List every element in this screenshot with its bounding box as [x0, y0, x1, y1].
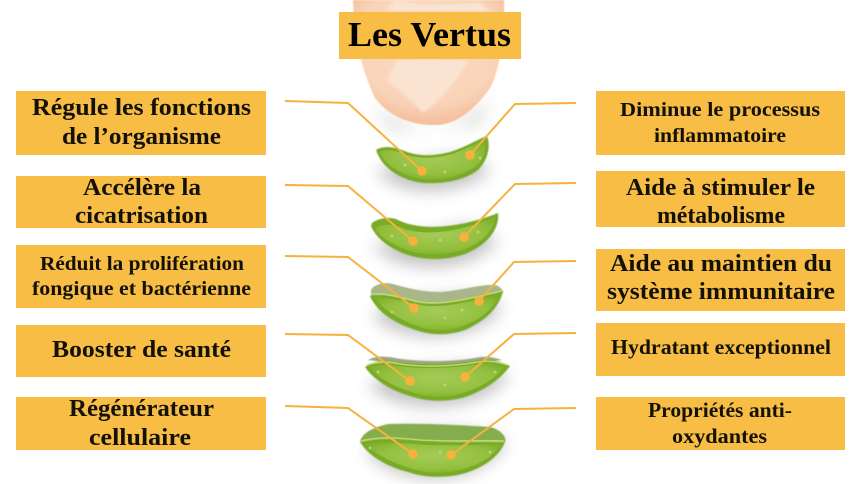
label: Propriétés anti-oxydantes: oxydantes — [672, 424, 767, 448]
label: Réduit la prolifération fongique et bactérienne: fongique et bactérienne — [32, 278, 251, 300]
label: Hydratant exceptionnel: Hydratant exceptionnel — [611, 335, 831, 359]
label: Booster de santé: Booster de santé — [52, 336, 231, 363]
label: Réduit la prolifération fongique et bactérienne: Réduit la prolifération — [40, 253, 245, 275]
connector: left 3 — [285, 256, 419, 313]
connector: right 5 — [446, 408, 576, 460]
connector: left 2 — [285, 185, 418, 246]
label: Propriétés anti-oxydantes — [596, 397, 845, 450]
label: Diminue le processus inflammatoire — [596, 91, 845, 155]
label: Régule les fonctions de l'organisme — [16, 91, 266, 155]
label: Régénérateur cellulaire — [16, 395, 266, 451]
label: Aide à stimuler le métabolisme: métabolisme — [657, 203, 785, 229]
label: Aide au maintien du système immunitaire: Aide au maintien du — [610, 251, 832, 277]
label: Propriétés anti-oxydantes: Propriétés anti- — [648, 398, 792, 422]
connector: left 4 — [285, 334, 415, 386]
icon: aloe slice 2 — [371, 213, 498, 267]
connector: right 1 — [465, 103, 576, 160]
label: Booster de santé — [16, 325, 266, 377]
label: Régénérateur cellulaire: cellulaire — [89, 424, 191, 451]
label: Régénérateur cellulaire: Régénérateur — [69, 395, 214, 422]
connector: right 2 — [459, 183, 576, 242]
connector: right 4 — [460, 333, 576, 382]
label: Hydratant exceptionnel — [596, 323, 845, 376]
icon: aloe slice 4 — [365, 357, 510, 406]
label: Réduit la prolifération fongique et bactérienne — [16, 245, 266, 308]
icon: bowl with aloe gel — [353, 0, 504, 130]
label: Aide à stimuler le métabolisme — [596, 171, 845, 229]
connector: left 1 — [285, 101, 427, 176]
connector: left 5 — [285, 406, 418, 459]
title: Les Vertus — [348, 15, 511, 54]
label: Régule les fonctions de l'organisme: Régule les fonctions — [32, 94, 251, 121]
label: Diminue le processus inflammatoire: Diminue le processus — [620, 99, 820, 121]
label: Diminue le processus inflammatoire: inflammatoire — [654, 125, 786, 147]
label: Aide au maintien du système immunitaire — [596, 249, 845, 311]
label: Accélère la cicatrisation: cicatrisation — [75, 202, 208, 229]
icon: aloe slice 1 — [376, 136, 490, 191]
label: Aide au maintien du système immunitaire: système immunitaire — [607, 279, 835, 305]
connector: right 3 — [474, 261, 576, 306]
icon: aloe slice 3 — [370, 283, 503, 336]
label: Aide à stimuler le métabolisme: Aide à stimuler le — [626, 175, 815, 201]
icon: aloe slice 5 — [360, 424, 507, 479]
label: Accélère la cicatrisation: Accélère la — [83, 174, 201, 201]
label: Accélère la cicatrisation — [16, 174, 266, 229]
label: Régule les fonctions de l'organisme: de l’organisme — [62, 123, 221, 150]
